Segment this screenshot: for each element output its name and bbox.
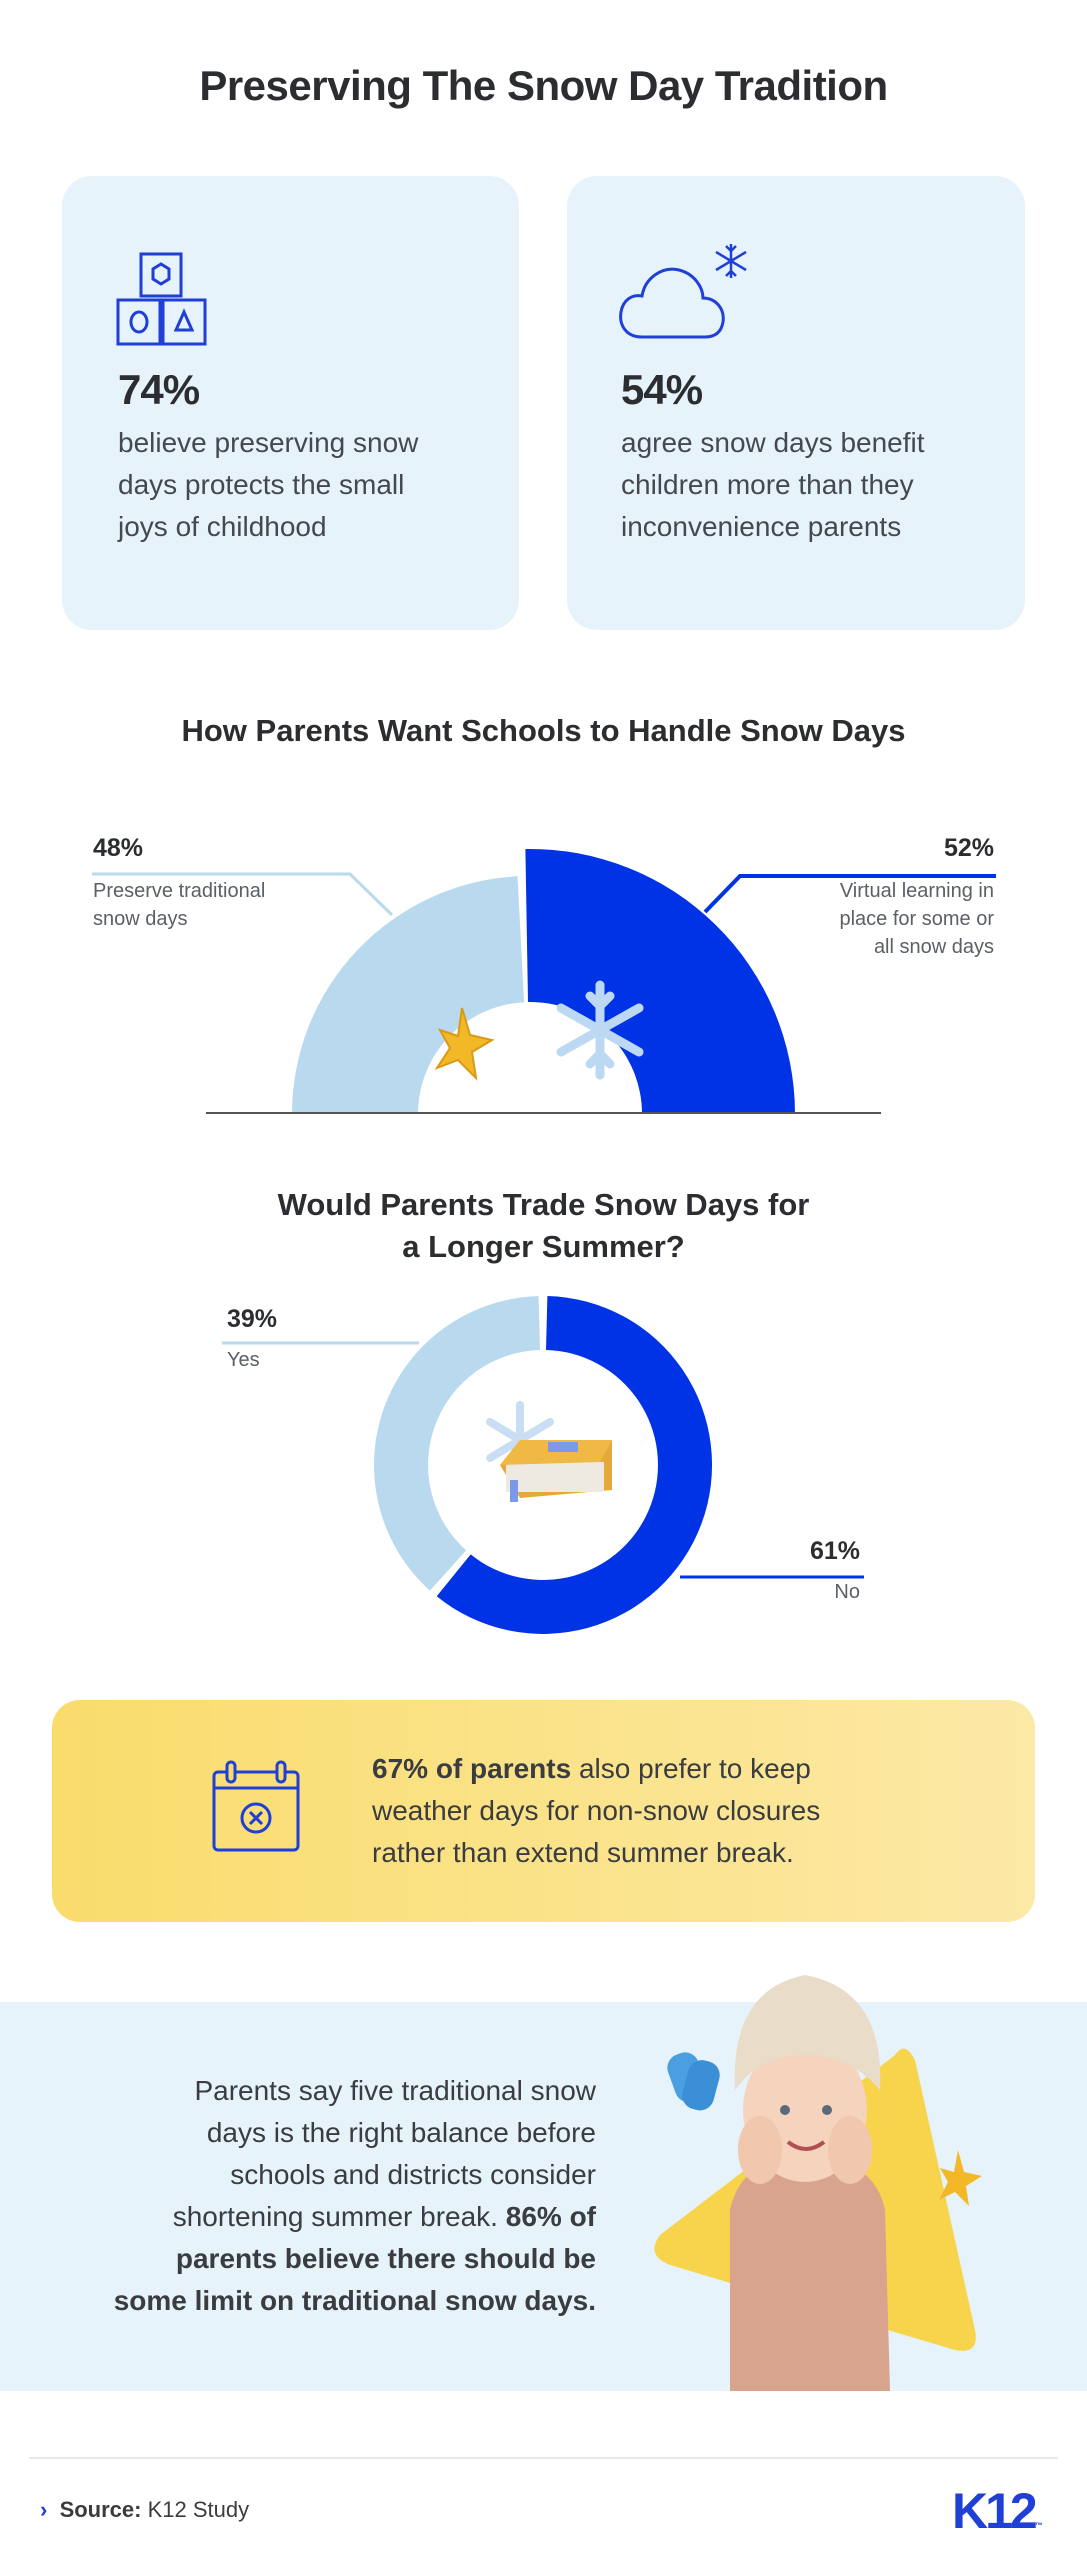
text: callout: [372, 1753, 820, 1868]
label: 52%: place for some or: [839, 908, 994, 930]
heading: trade snow days: a Longer Summer?: [402, 1229, 685, 1264]
stat: 74%: 74%: [118, 366, 199, 413]
text: 54% description: children more than they: [621, 469, 914, 500]
text: five snow days: parents believe there should be: [176, 2243, 596, 2274]
leader line 39%: [222, 1342, 419, 1344]
segment: 48% preserve: [292, 876, 524, 1114]
text: 54% description: agree snow days benefit: [621, 427, 925, 458]
panel: 54% stat card: [567, 176, 1025, 630]
leader line 61%: [680, 1576, 864, 1578]
icon: calendar: [212, 1760, 300, 1852]
text: 74% description: believe preserving snow: [118, 427, 418, 458]
text: five snow days: days is the right balance before: [207, 2117, 596, 2148]
icon: blocks: [116, 252, 206, 346]
label: 52%: Virtual learning in: [840, 880, 994, 902]
text: 74% description: [117, 427, 418, 542]
text: 74% description: joys of childhood: [118, 511, 327, 542]
chart: donut: [374, 1296, 712, 1634]
label: 61% no: No: [834, 1581, 860, 1603]
icon: star: [939, 2150, 982, 2206]
logo: K12: K12™: [952, 2483, 1043, 2539]
text: callout: weather days for non-snow closures: [372, 1795, 820, 1826]
heading: trade snow days: Would Parents Trade Snow Days for: [278, 1187, 809, 1222]
panel: 74% stat card: [62, 176, 519, 630]
label: 39% yes: 39%: [227, 1305, 277, 1333]
text: five snow days: some limit on traditional snow days.: [114, 2285, 596, 2316]
text: 54% description: inconvenience parents: [621, 511, 901, 542]
callout: 67% of parents: [52, 1700, 1035, 1922]
text: callout: rather than extend summer break.: [372, 1837, 794, 1868]
text: five snow days: schools and districts consider: [230, 2159, 596, 2190]
label: 61% no: [810, 1537, 860, 1603]
label: 52%: all snow days: [874, 936, 994, 958]
label: 48%: 48%: [93, 834, 143, 862]
icon: snowflake: [561, 985, 639, 1075]
label: 52%: [839, 834, 994, 958]
icon: book with snowflake: [490, 1405, 612, 1502]
stat: 54%: 54%: [621, 366, 702, 413]
label: 48%: [93, 834, 265, 930]
text: 54% description: [621, 427, 925, 542]
heading: trade snow days: [278, 1187, 809, 1264]
panel: five snow days band: [0, 2002, 1087, 2391]
icon: star: [437, 1008, 492, 1078]
label: 39% yes: [227, 1305, 277, 1371]
icon: cloud with snowflake: [619, 244, 747, 338]
label: 61% no: 61%: [810, 1537, 860, 1565]
illustration: girl with hat: [654, 1975, 982, 2391]
leader line 52%: [705, 876, 996, 912]
label: 48%: Preserve traditional: [93, 880, 265, 902]
heading: snow days handling: How Parents Want Schools to Handle Snow Days: [181, 713, 906, 748]
text: callout: 67% of parents also prefer to keep: [372, 1753, 811, 1784]
source: › Source: K12 Study: [40, 2497, 249, 2522]
leader line 48%: [92, 874, 392, 915]
text: five snow days: shortening summer break. 86% of: [173, 2201, 596, 2232]
icon: mittens: [663, 2048, 723, 2114]
text: five snow days: [114, 2075, 596, 2316]
label: 39% yes: Yes: [227, 1349, 260, 1371]
divider: [29, 2457, 1058, 2459]
label: 52%: 52%: [944, 834, 994, 862]
chart: semi-donut: [92, 849, 996, 1634]
text: five snow days: Parents say five traditional snow: [194, 2075, 596, 2106]
segment: 52% virtual: [525, 849, 795, 1114]
label: 48%: snow days: [93, 908, 188, 930]
title: Preserving The Snow Day Tradition: [199, 62, 888, 109]
text: 74% description: days protects the small: [118, 469, 404, 500]
